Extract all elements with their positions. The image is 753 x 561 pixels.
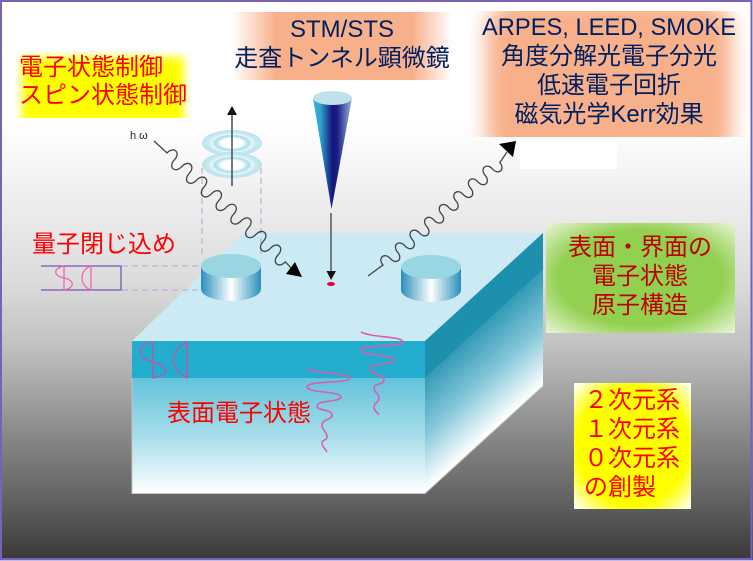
- arrow: tunnel current: [326, 213, 336, 280]
- surface state wave 1: [307, 369, 350, 452]
- icon: STM tip: [313, 91, 352, 209]
- icon: left cylinder dot: [201, 254, 261, 301]
- callout: STM/STS: 走査トンネル顕微鏡: [234, 45, 450, 72]
- quantum well diagram: [41, 266, 121, 290]
- callout: surface and interface: 表面・界面の: [568, 234, 712, 261]
- callout: STM/STS: STM/STS: [290, 16, 394, 43]
- callout: ARPES LEED SMOKE: 角度分解光電子分光: [501, 43, 717, 70]
- label: surface electronic states: 表面電子状態: [167, 400, 311, 427]
- block lower edge: [132, 378, 543, 494]
- block side surface layer: [425, 233, 543, 378]
- callout: ARPES LEED SMOKE: 磁気光学Kerr効果: [514, 101, 704, 128]
- arrow: upward emission: [227, 106, 237, 186]
- callout: surface and interface: 原子構造: [592, 292, 688, 319]
- red spot: [327, 282, 335, 286]
- callout: low dimensional systems: １次元系: [584, 416, 680, 443]
- callout: surface and interface: [546, 223, 735, 333]
- icon: right cylinder dot: [401, 255, 461, 302]
- label: h omega: h ω: [130, 130, 148, 142]
- callout: STM/STS: [232, 12, 452, 80]
- callout: electron and spin control: スピン状態制御: [19, 82, 187, 109]
- callout: ARPES LEED SMOKE: 低速電子回折: [537, 72, 681, 99]
- arrow: incoming photon wave: [154, 141, 302, 277]
- block top surface: [132, 233, 543, 341]
- panel: crystal block: [132, 233, 543, 494]
- callout: ARPES LEED SMOKE: [472, 11, 746, 137]
- block front bulk: [132, 378, 425, 493]
- callout: electron and spin control: 電子状態制御: [19, 54, 163, 81]
- callout: low dimensional systems: の創製: [584, 474, 656, 501]
- callout: low dimensional systems: ２次元系: [584, 387, 680, 414]
- dashed guide lines: [122, 168, 261, 290]
- callout: surface and interface: 電子状態: [592, 263, 688, 290]
- callout: low dimensional systems: ０次元系: [584, 445, 680, 472]
- surface wavefunctions in layer: [140, 342, 187, 378]
- surface state wave 2: [361, 332, 403, 415]
- label: quantum confinement: 量子閉じ込め: [32, 231, 176, 258]
- callout: low dimensional systems: [574, 383, 691, 509]
- icon: emission rings: [202, 130, 262, 178]
- callout: ARPES LEED SMOKE: ARPES, LEED, SMOKE: [482, 14, 736, 41]
- callout: electron and spin control: [19, 54, 187, 132]
- block side bulk: [425, 270, 543, 493]
- block front surface layer: [132, 341, 425, 378]
- white patch: [520, 140, 617, 169]
- arrow: outgoing photoelectron wave: [368, 141, 516, 276]
